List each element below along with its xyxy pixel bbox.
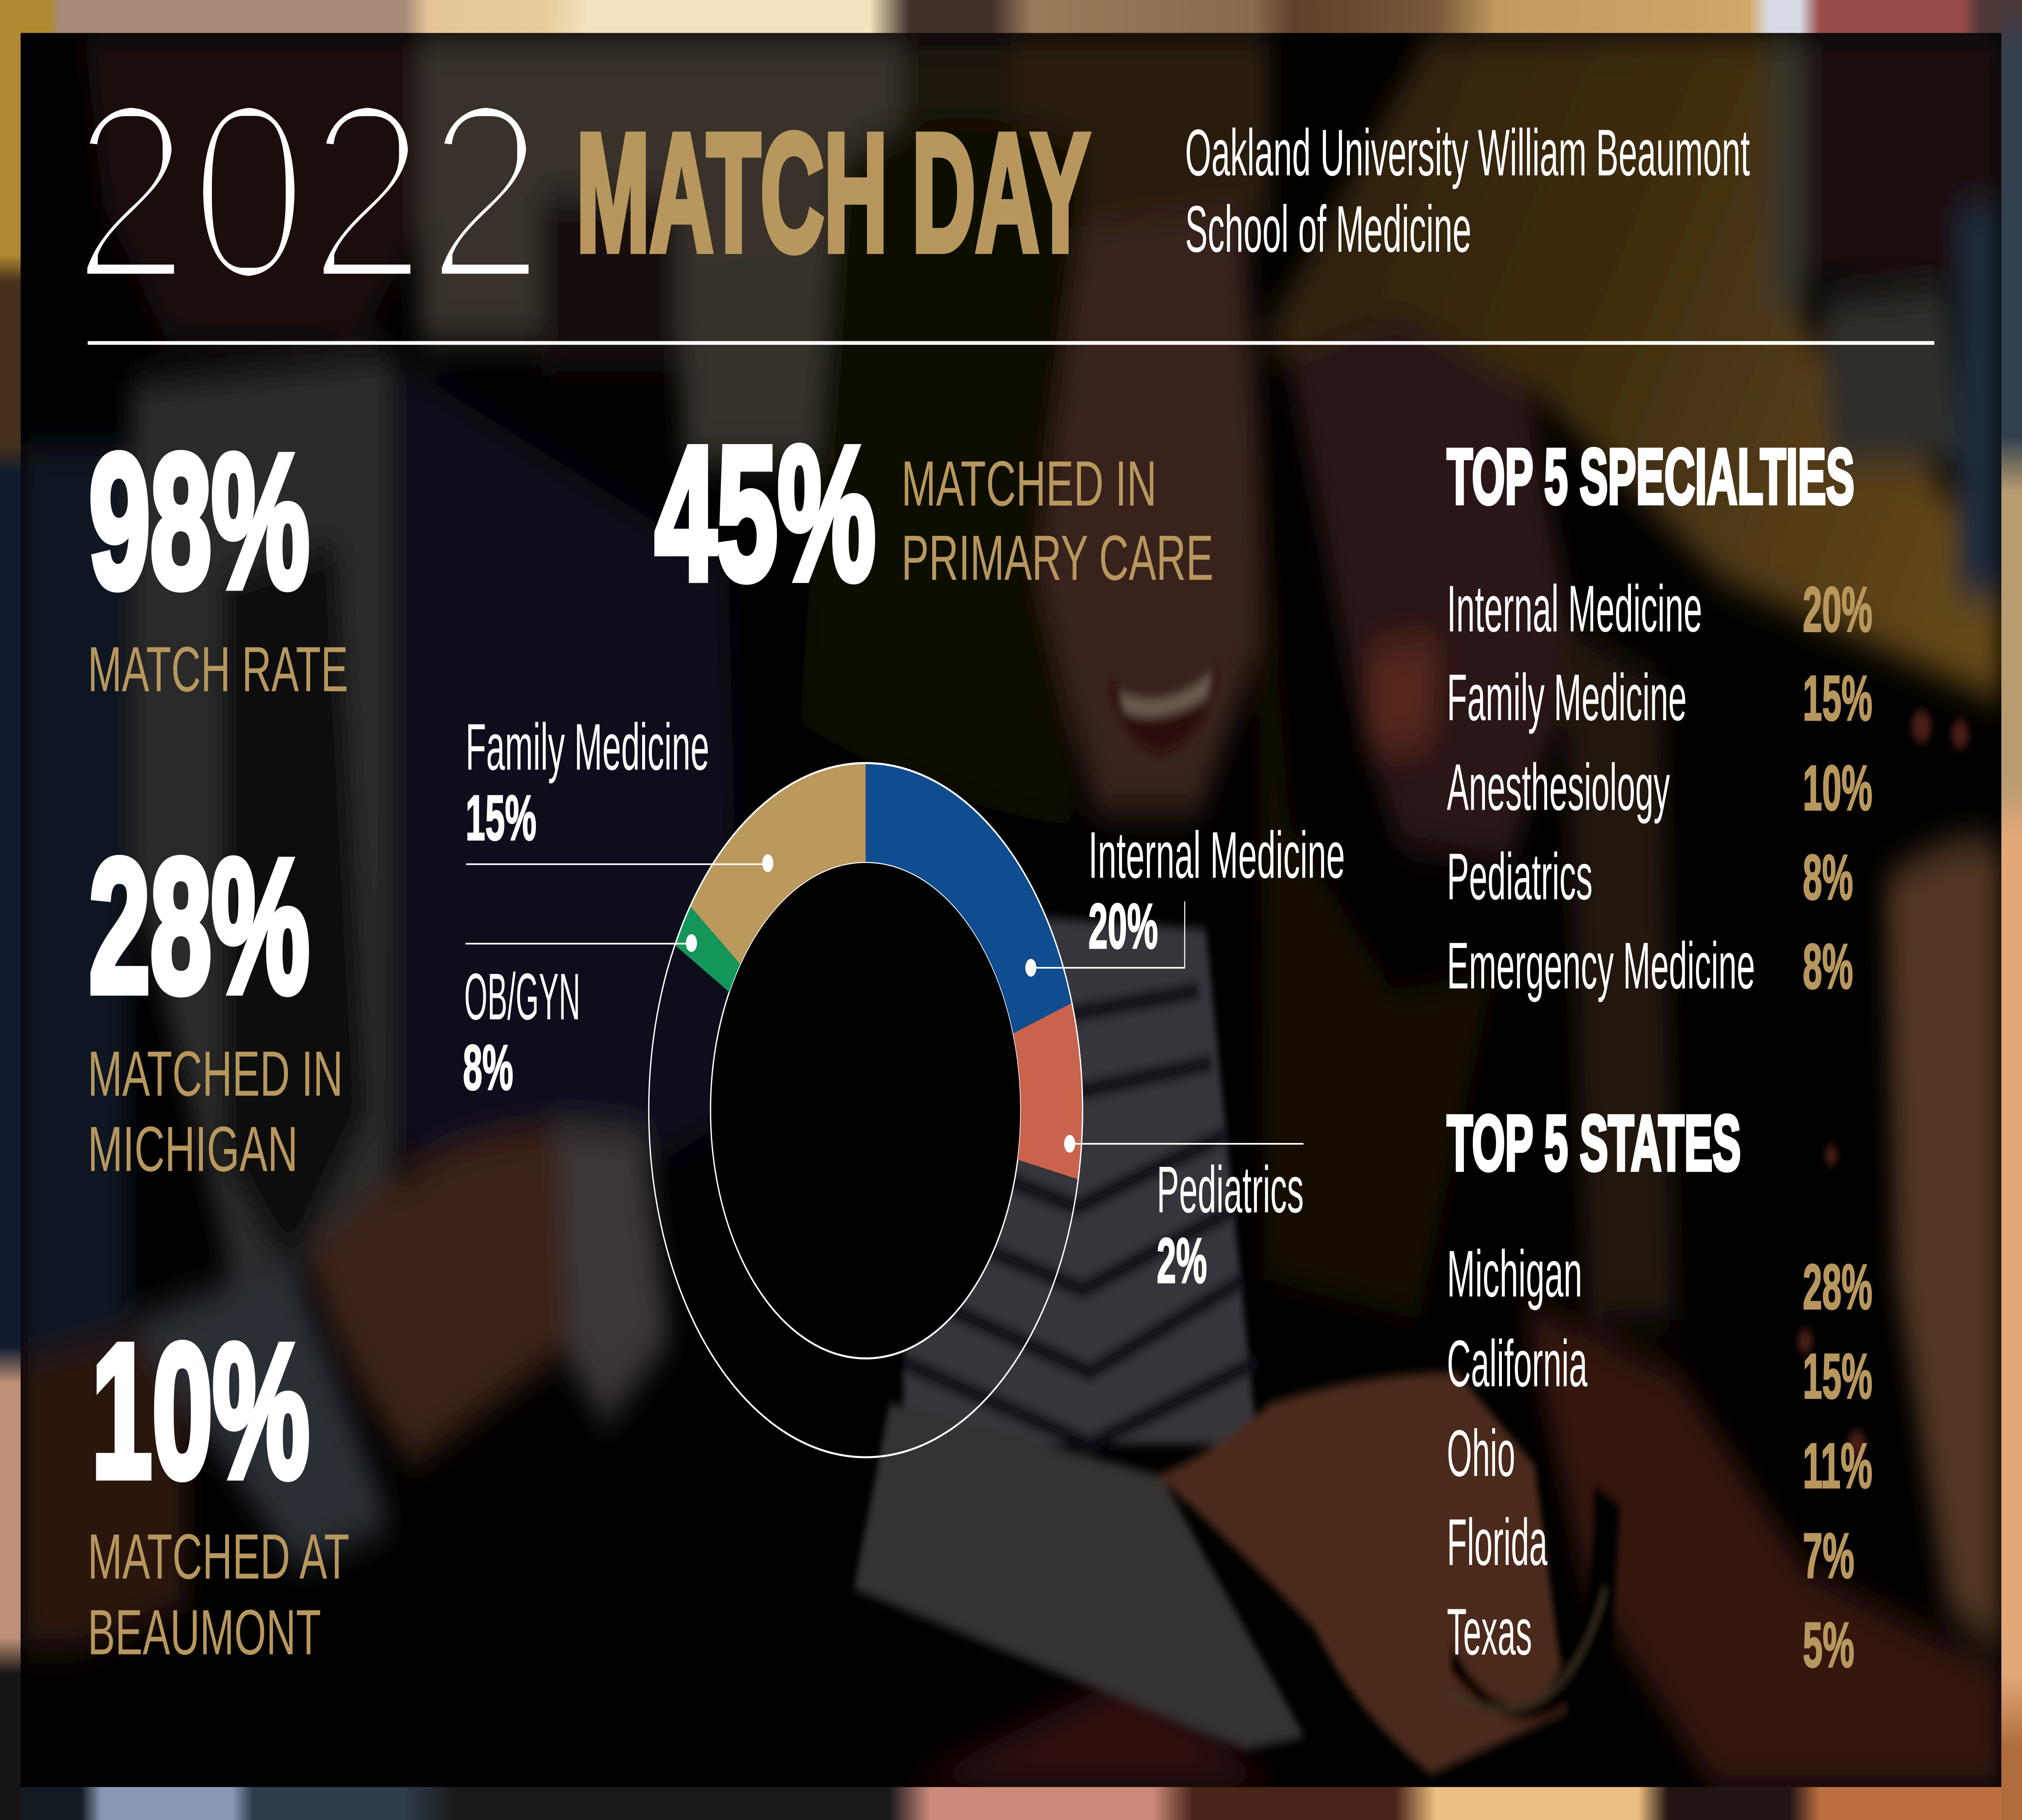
callout: ob/gyn: OB/GYN (464, 959, 580, 1034)
list: top 5 states: Ohio (1447, 1416, 1515, 1490)
donut outer ring (649, 763, 1083, 1457)
list: top 5 specialties (1447, 571, 1872, 1003)
stat: 10% matched at Beaumont: MATCHED AT (88, 1521, 349, 1593)
list: top 5 specialties: 20% (1803, 574, 1872, 646)
segment: internal medicine (866, 763, 1072, 1033)
list: top 5 specialties: Pediatrics (1447, 840, 1593, 914)
list: top 5 specialties: 15% (1803, 662, 1872, 734)
callout: pediatrics (1064, 1135, 1304, 1297)
list: top 5 specialties: Anesthesiology (1447, 750, 1670, 824)
stat: 45% matched in primary care (655, 410, 1214, 620)
stat: 98% match rate: 98% (89, 417, 309, 628)
stat: 10% matched at Beaumont: BEAUMONT (88, 1596, 321, 1669)
stat: 28% matched in Michigan: MATCHED IN (88, 1038, 343, 1110)
header divider (88, 341, 1934, 345)
callout: ob/gyn (463, 934, 697, 1104)
list: top 5 specialties: 8% (1803, 931, 1853, 1003)
list: top 5 specialties: Internal Medicine (1447, 571, 1702, 646)
callout: family medicine (465, 710, 773, 872)
list: top 5 specialties: Family Medicine (1447, 660, 1687, 734)
list: top 5 states: 5% (1803, 1609, 1854, 1681)
subtitle: school name: School of Medicine (1185, 192, 1471, 266)
stat: 45% matched in primary care: 45% (655, 410, 876, 620)
segment: pediatrics (1013, 1003, 1083, 1179)
heading: top 5 states: TOP 5 STATES (1447, 1102, 1741, 1189)
segment: family medicine (690, 763, 866, 964)
stat: 10% matched at Beaumont: 10% (91, 1307, 309, 1518)
callout: ob/gyn: 8% (463, 1032, 513, 1104)
heading: top 5 specialties: TOP 5 SPECIALTIES (1447, 436, 1854, 522)
list: top 5 states: 7% (1803, 1520, 1854, 1592)
stat: 10% matched at Beaumont (88, 1307, 349, 1669)
list: top 5 specialties: Emergency Medicine (1447, 929, 1755, 1003)
stat: 28% matched in Michigan: MICHIGAN (88, 1113, 298, 1185)
list: top 5 specialties: 8% (1803, 842, 1853, 914)
title: 2022: 2022 (72, 52, 544, 332)
list: top 5 specialties: 10% (1803, 752, 1872, 824)
donut chart (649, 763, 1083, 1457)
list: top 5 states: Florida (1447, 1505, 1548, 1579)
callout: family medicine: 15% (465, 782, 537, 854)
list: top 5 states (1447, 1237, 1872, 1681)
stat: 98% match rate (88, 417, 348, 706)
callout: internal medicine: 20% (1088, 891, 1158, 963)
title: MATCH DAY: MATCH DAY (576, 102, 1090, 288)
stat: 98% match rate: MATCH RATE (88, 633, 348, 706)
stat: 45% matched in primary care: PRIMARY CARE (901, 522, 1214, 594)
list: top 5 states: 15% (1803, 1340, 1872, 1413)
list: top 5 states: California (1447, 1327, 1588, 1401)
callout: family medicine: Family Medicine (465, 710, 709, 784)
subtitle: school name (1185, 116, 1750, 266)
list: top 5 states: Texas (1447, 1595, 1532, 1669)
stat: 45% matched in primary care: MATCHED IN (901, 448, 1157, 520)
list: top 5 states: 28% (1803, 1251, 1872, 1323)
callout: internal medicine: Internal Medicine (1088, 818, 1345, 892)
stat: 28% matched in Michigan (88, 822, 343, 1185)
segment: ob/gyn (675, 906, 740, 992)
callout: pediatrics: Pediatrics (1157, 1152, 1304, 1227)
list: top 5 states: 11% (1803, 1430, 1872, 1502)
list: top 5 states: Michigan (1447, 1237, 1582, 1311)
callout: pediatrics: 2% (1157, 1225, 1207, 1297)
subtitle: school name: Oakland University William Beaumont (1185, 116, 1750, 190)
callout: internal medicine (1025, 818, 1345, 977)
stat: 28% matched in Michigan: 28% (89, 822, 309, 1033)
donut inner disc and ring (711, 862, 1021, 1359)
